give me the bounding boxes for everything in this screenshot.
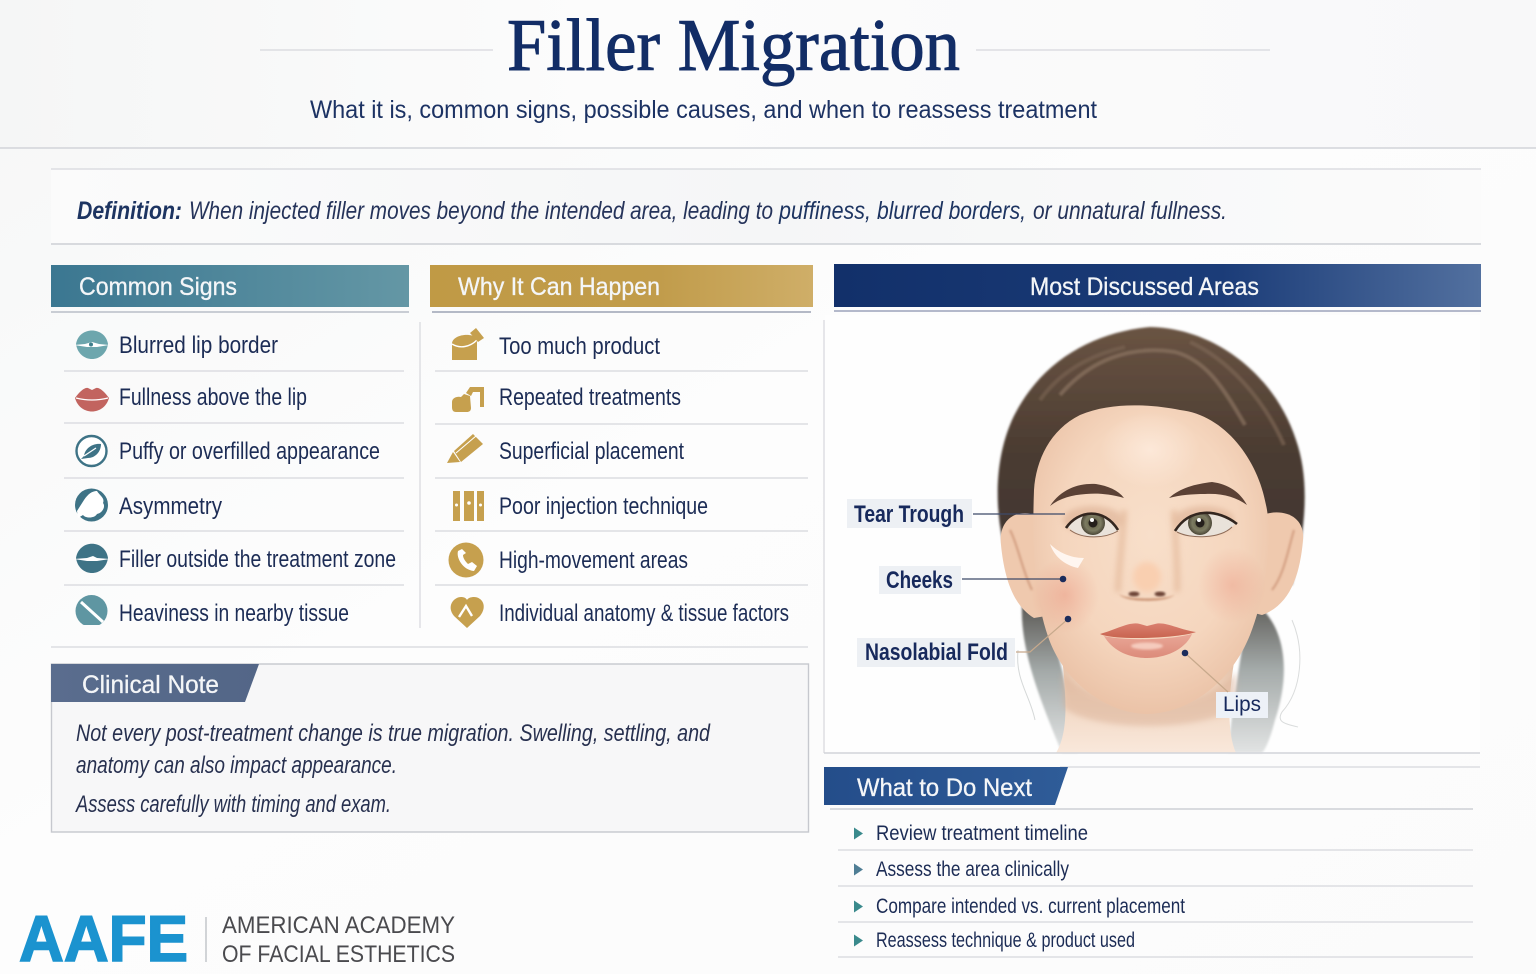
grey hair strands [1022, 605, 1078, 753]
title: Filler Migration [507, 5, 960, 87]
definition band: blurred borders, [877, 197, 1026, 225]
text: repeated treatments: Repeated treatments [499, 384, 681, 411]
left eye [1066, 511, 1118, 537]
heading: why it can happen [430, 265, 813, 312]
definition band: When injected filler moves beyond the intended area, leading to [189, 197, 773, 225]
text: asymmetry: Asymmetry [119, 493, 222, 520]
logo: AAFE [19, 902, 455, 974]
step: assess the area clinically: Assess the area clinically [876, 858, 1069, 881]
definition band: or unnatural fullness. [1033, 197, 1227, 225]
panel: what to do next [824, 767, 1480, 957]
text: filler outside the treatment zone: Filler outside the treatment zone [119, 546, 396, 573]
heading: clinical note: Clinical Note [82, 671, 219, 699]
icon: heaviness [76, 595, 108, 629]
note text [74, 720, 711, 818]
callout: lips: Lips [1223, 693, 1261, 716]
eye area shadow [1063, 506, 1123, 534]
text: fullness above the lip: Fullness above the lip [119, 384, 307, 411]
subtitle: What it is, common signs, possible causes, and when to reassess treatment [310, 96, 1097, 124]
icon: individual anatomy [451, 597, 484, 628]
ears [1001, 513, 1046, 618]
panel: most discussed areas heading: Most Discussed Areas [1030, 273, 1259, 301]
icon: poor injection technique [453, 491, 484, 521]
callout: cheeks [879, 566, 1066, 594]
heading: what to do next: What to Do Next [857, 774, 1032, 802]
nose shading [1118, 510, 1177, 592]
header band [0, 0, 1536, 148]
heading: what to do next [824, 767, 1473, 809]
definition band: Definition: [77, 197, 182, 225]
callout: tear trough [847, 499, 1065, 528]
text: too much product: Too much product [499, 333, 660, 360]
callout: lips [1182, 650, 1268, 718]
text: poor injection technique: Poor injection technique [499, 493, 708, 520]
text: puffy or overfilled appearance: Puffy or overfilled appearance [119, 438, 380, 465]
panel: common signs [51, 265, 420, 629]
logo: AAFE: AMERICAN ACADEMY [222, 912, 455, 939]
text: high-movement areas: High-movement areas [499, 547, 688, 574]
icon: repeated treatments [452, 387, 484, 412]
step: reassess technique and product: Reassess technique & product used [876, 929, 1135, 952]
step: review treatment timeline: Review treatment timeline [876, 822, 1088, 845]
illustration: woman's face [996, 326, 1306, 752]
step: compare placement: Compare intended vs. current placement [876, 895, 1185, 918]
note text: anatomy can also impact appearance. [76, 752, 397, 779]
logo: AAFE: AAFE [19, 902, 188, 974]
text: superficial placement: Superficial placement [499, 438, 684, 465]
note text: Not every post-treatment change is true migration. Swelling, settling, and [76, 720, 711, 747]
cheek blush [1031, 557, 1099, 633]
eyebrows [1050, 484, 1124, 506]
callout: cheeks: Cheeks [886, 567, 953, 594]
heading: common signs [51, 265, 409, 312]
neck [1056, 640, 1238, 753]
callout: nasolabial fold [857, 616, 1071, 667]
hair [998, 327, 1305, 585]
right eye [1175, 511, 1237, 537]
icon: blurred lip [74, 330, 109, 359]
note text: Assess carefully with timing and exam. [74, 791, 391, 818]
text: heaviness in nearby tissue: Heaviness in nearby tissue [119, 600, 349, 627]
face shape [1033, 405, 1269, 714]
icon: high-movement areas [448, 542, 484, 578]
icon: lips [75, 388, 109, 412]
icon: puffy [76, 436, 106, 466]
callout: nasolabial fold: Nasolabial Fold [865, 639, 1008, 666]
icon: too much product [452, 328, 484, 360]
panel: most discussed areas heading [834, 264, 1481, 311]
lips [1100, 623, 1196, 638]
heading: why it can happen: Why It Can Happen [458, 273, 660, 301]
heading: clinical note [51, 664, 259, 702]
icon: superficial placement [447, 434, 483, 463]
icon: filler outside zone [74, 544, 110, 573]
forehead highlight [1100, 412, 1200, 488]
under-eye crescent [1050, 544, 1084, 568]
callout: tear trough: Tear Trough [854, 501, 964, 528]
definition band [51, 169, 1481, 244]
heading: common signs: Common Signs [79, 273, 237, 301]
logo: AAFE: OF FACIAL ESTHETICS [222, 941, 455, 968]
panel: clinical note [51, 664, 808, 832]
icon: asymmetry [75, 488, 108, 522]
definition band: puffiness, [778, 197, 871, 225]
text: individual anatomy and tissue factors: Individual anatomy & tissue factors [499, 600, 789, 627]
panel: why it can happen [430, 265, 824, 753]
text: blurred lip border: Blurred lip border [119, 332, 278, 359]
